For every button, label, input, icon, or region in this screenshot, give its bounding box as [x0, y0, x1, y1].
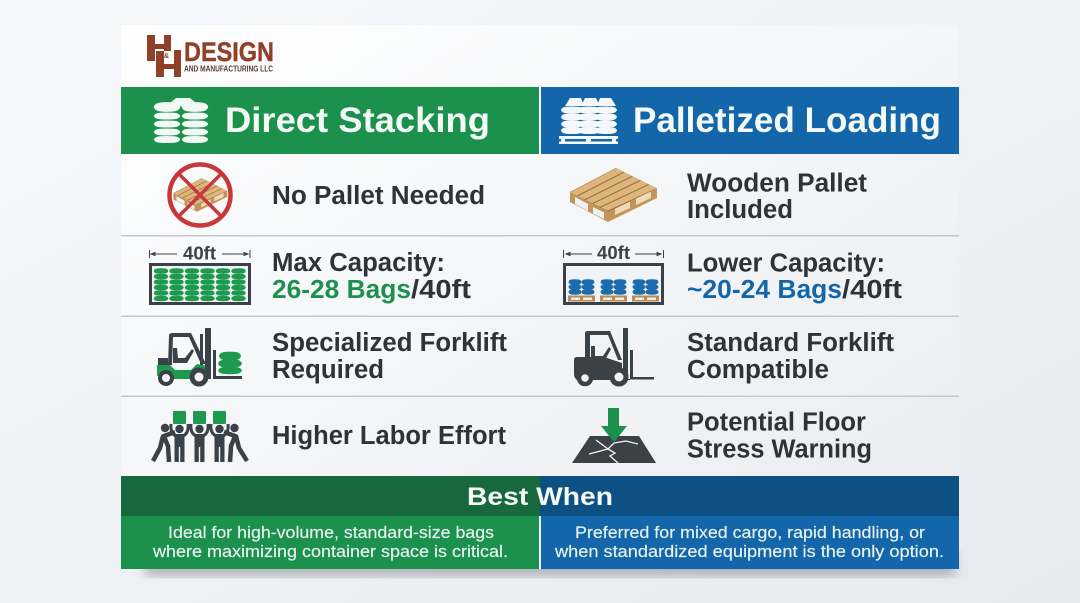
row: wooden pallet: [570, 168, 868, 224]
icon: workers lifting boxes: [153, 411, 247, 462]
text: wooden pallet included: [687, 170, 868, 224]
logo: AND MANUFACTURING LLC: [184, 64, 273, 74]
text: max capacity: /40ft: [411, 276, 472, 304]
panel: direct stacking column: [121, 87, 539, 462]
text: standard forklift compatible: Compatible: [687, 356, 829, 384]
text: lower capacity: /40ft: [842, 276, 903, 304]
row: floor stress: [572, 408, 872, 464]
panel: palletized loading column: [541, 87, 959, 464]
icon: dark forklift: [574, 328, 654, 384]
panel: best when: [121, 476, 959, 569]
icon: no pallet: [170, 164, 230, 226]
note: direct stacking best when: where maximizing container space is critical.: [152, 542, 508, 561]
icon: container with pallets: [564, 243, 664, 304]
row: no pallet needed: [170, 164, 485, 226]
text: higher labor effort: Higher Labor Effort: [272, 422, 507, 450]
heading: palletized loading: Palletized Loading: [633, 101, 941, 140]
icon: wooden pallet: [570, 168, 657, 222]
text: standard forklift compatible: [687, 329, 895, 384]
text: max capacity: [272, 249, 472, 304]
text: wooden pallet included: Included: [687, 196, 793, 224]
text: standard forklift compatible: Standard Forklift: [687, 329, 895, 357]
note: direct stacking best when: [121, 516, 539, 569]
note: direct stacking best when: Ideal for high-volume, standard-size bags: [168, 523, 494, 542]
icon: container with pallets: 40ft: [597, 243, 630, 263]
note: palletized best when: when standardized equipment is the only option.: [554, 542, 944, 561]
note: palletized best when: [541, 516, 959, 569]
logo: &: [164, 53, 169, 60]
row: labor effort: [153, 411, 507, 462]
text: specialized forklift required: [272, 329, 508, 384]
text: wooden pallet included: Wooden Pallet: [687, 170, 868, 198]
note: palletized best when: Preferred for mixed cargo, rapid handling, or: [575, 523, 925, 542]
icon: container full of bags: [150, 244, 250, 304]
row: max capacity: [150, 244, 472, 304]
icon: palletized bags: [559, 98, 618, 144]
row: standard forklift: [574, 328, 895, 384]
text: max capacity: Max Capacity:: [272, 249, 445, 277]
text: potential floor stress warning: [687, 408, 872, 464]
icon: green forklift with bags: [157, 328, 242, 384]
text: potential floor stress warning: Potential Floor: [687, 408, 866, 436]
header: direct stacking: [121, 87, 539, 154]
icon: floor crack with arrow: [572, 408, 656, 463]
band: best when heading: Best When: [467, 483, 613, 511]
band: best when heading: [121, 476, 959, 516]
text: specialized forklift required: Specialized Forklift: [272, 329, 508, 357]
text: lower capacity: Lower Capacity:: [687, 250, 885, 278]
row: specialized forklift: [157, 328, 508, 384]
logo: DESIGN: [184, 37, 274, 67]
row: lower capacity: [564, 243, 903, 304]
logo: [147, 35, 274, 77]
text: no pallet needed: No Pallet Needed: [272, 182, 485, 210]
text: lower capacity: ~20-24 Bags: [687, 276, 842, 304]
text: potential floor stress warning: Stress Warning: [687, 436, 872, 464]
header: palletized loading: [541, 87, 959, 154]
heading: direct stacking: Direct Stacking: [225, 101, 490, 140]
icon: bag stack: [154, 98, 208, 143]
text: lower capacity: [687, 250, 903, 304]
card panel: [121, 25, 959, 569]
text: max capacity: 26-28 Bags: [272, 276, 411, 304]
icon: container full of bags: 40ft: [183, 244, 216, 264]
text: specialized forklift required: Required: [272, 356, 384, 384]
